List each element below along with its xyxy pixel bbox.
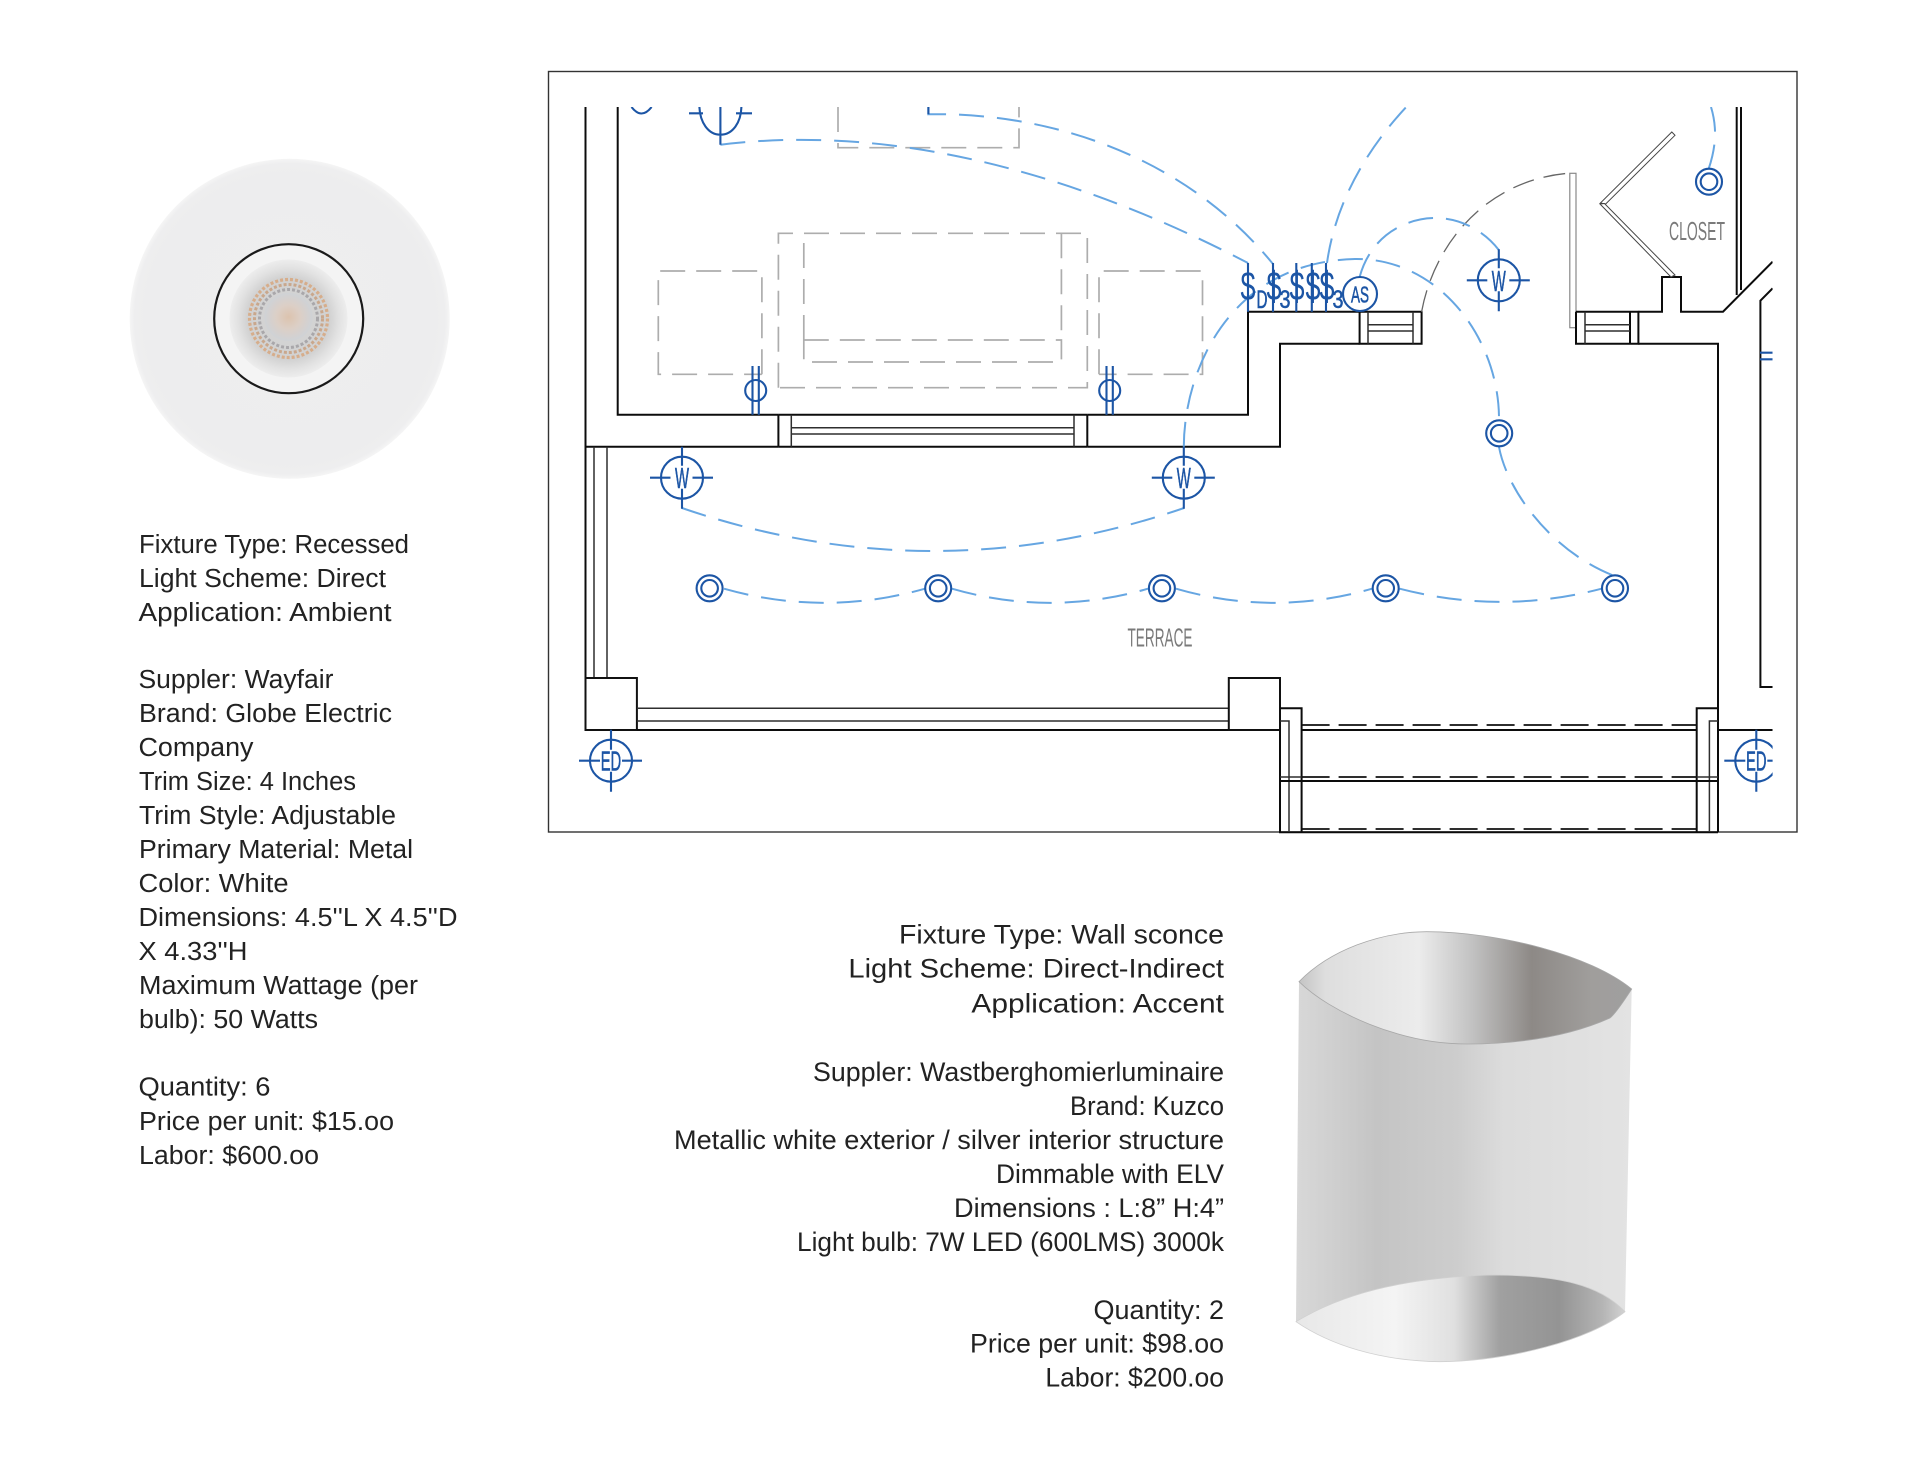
downlight black ring <box>214 244 363 393</box>
text block: recessed fixture specs: Company <box>138 734 254 762</box>
text block: recessed fixture specs: Suppler: Wayfair <box>138 666 334 694</box>
terrace left double wall <box>594 447 607 678</box>
text block: recessed fixture specs: Price per unit: $15.oo <box>139 1108 394 1136</box>
image: wall sconce <box>1296 932 1632 1362</box>
wall sconce W middle <box>1152 447 1215 509</box>
text block: recessed fixture specs: X 4.33''H <box>138 938 248 966</box>
recessed light rings <box>697 169 1722 601</box>
text block: recessed fixture specs: Labor: $600.oo <box>139 1142 319 1170</box>
wall sconce symbols <box>579 249 1787 792</box>
downlight trim plate <box>130 159 450 479</box>
text block: wall sconce specs: Light bulb: 7W LED (600LMS) 3000k <box>797 1227 1225 1257</box>
exterior fixture ED left: ED <box>601 746 621 777</box>
text block: wall sconce specs: Fixture Type: Wall sconce <box>899 919 1224 949</box>
bulb core <box>264 293 312 341</box>
right column <box>1229 678 1280 730</box>
exterior fixture ED right: ED <box>1746 746 1767 777</box>
switch cluster: D <box>1256 286 1268 314</box>
walls <box>586 107 1773 832</box>
bulb lens <box>230 260 348 378</box>
image: recessed downlight <box>130 159 450 479</box>
floor plan drawing <box>579 103 1787 832</box>
switch cluster: $ <box>1306 263 1321 309</box>
terrace railing <box>637 708 1229 730</box>
wall sconce W right <box>1467 249 1530 311</box>
text block: wall sconce specs: Labor: $200.oo <box>1045 1363 1224 1393</box>
label: closet: CLOSET <box>1669 216 1725 246</box>
switch cluster: $ <box>1240 263 1256 309</box>
switch cluster: $ <box>1266 263 1282 309</box>
window <box>778 415 1087 447</box>
text block: recessed fixture specs: Light Scheme: Direct <box>139 565 386 593</box>
bulb reflector <box>250 280 328 358</box>
text block: recessed fixture specs: Primary Material: Metal <box>139 836 413 864</box>
closet bifold door <box>1600 132 1675 277</box>
text block: recessed fixture specs: Quantity: 6 <box>138 1074 270 1102</box>
text block: recessed fixture specs: Application: Ambient <box>138 599 392 627</box>
symbol: top partial fixtures <box>632 107 928 145</box>
text block: recessed fixture specs: Brand: Globe Electric <box>139 700 392 728</box>
symbol: duplex outlets <box>745 366 1120 415</box>
text block: wall sconce specs: Metallic white exterior / silver interior structure <box>674 1125 1224 1155</box>
floor plan frame <box>548 72 1797 832</box>
switch cluster <box>1240 263 1344 314</box>
text block: recessed fixture specs: Fixture Type: Recessed <box>139 531 409 559</box>
text block: wall sconce specs: Price per unit: $98.oo <box>970 1328 1224 1358</box>
text block: recessed fixture specs: Color: White <box>138 870 288 898</box>
text block: wall sconce specs: Light Scheme: Direct-Indirect <box>848 953 1225 983</box>
text block: recessed fixture specs: Trim Size: 4 Inches <box>139 768 356 796</box>
text block: wall sconce specs: Dimensions : L:8” H:4” <box>954 1193 1224 1223</box>
text block: wall sconce specs <box>674 919 1225 1393</box>
switch cluster: $ <box>1290 263 1305 309</box>
door swing arc <box>1422 173 1572 312</box>
left column <box>586 678 637 730</box>
switch cluster: 3 <box>1280 286 1290 314</box>
dashed lighting circuits <box>682 103 1715 603</box>
text block: wall sconce specs: Application: Accent <box>971 988 1225 1018</box>
switch cluster: $ <box>1320 263 1335 309</box>
text block: recessed fixture specs <box>138 531 457 1170</box>
outlet mark <box>1760 353 1773 359</box>
door leaf <box>1570 173 1576 328</box>
sconce bottom opening <box>1296 1275 1625 1362</box>
text block: wall sconce specs: Dimmable with ELV <box>996 1159 1224 1189</box>
text block: wall sconce specs: Suppler: Wastberghomierluminaire <box>813 1057 1224 1087</box>
text block: recessed fixture specs: bulb): 50 Watts <box>139 1006 318 1034</box>
wall sconce W left: W <box>675 463 689 495</box>
sconce body <box>1296 982 1632 1322</box>
text block: wall sconce specs: Brand: Kuzco <box>1070 1091 1224 1121</box>
wall sconce W right: W <box>1492 266 1506 298</box>
wall sconce W middle: W <box>1177 463 1191 495</box>
furniture outlines <box>658 107 1202 388</box>
text block: recessed fixture specs: Maximum Wattage (per <box>139 972 419 1000</box>
switch cluster: 3 <box>1332 286 1344 314</box>
text block: recessed fixture specs: Trim Style: Adjustable <box>139 802 396 830</box>
exterior fixture ED left <box>579 730 642 792</box>
exterior fixture ED right <box>1724 730 1773 792</box>
sconce top opening <box>1299 932 1632 1044</box>
left door <box>1360 312 1422 344</box>
text block: wall sconce specs: Quantity: 2 <box>1094 1295 1224 1325</box>
AS sensor symbol <box>1343 277 1377 311</box>
text block: recessed fixture specs: Dimensions: 4.5''L X 4.5''D <box>138 904 457 932</box>
AS sensor symbol: AS <box>1351 282 1369 308</box>
right door <box>1576 312 1638 344</box>
label: terrace: TERRACE <box>1128 623 1192 653</box>
stairs <box>1280 708 1718 832</box>
wall sconce W left <box>650 447 713 509</box>
